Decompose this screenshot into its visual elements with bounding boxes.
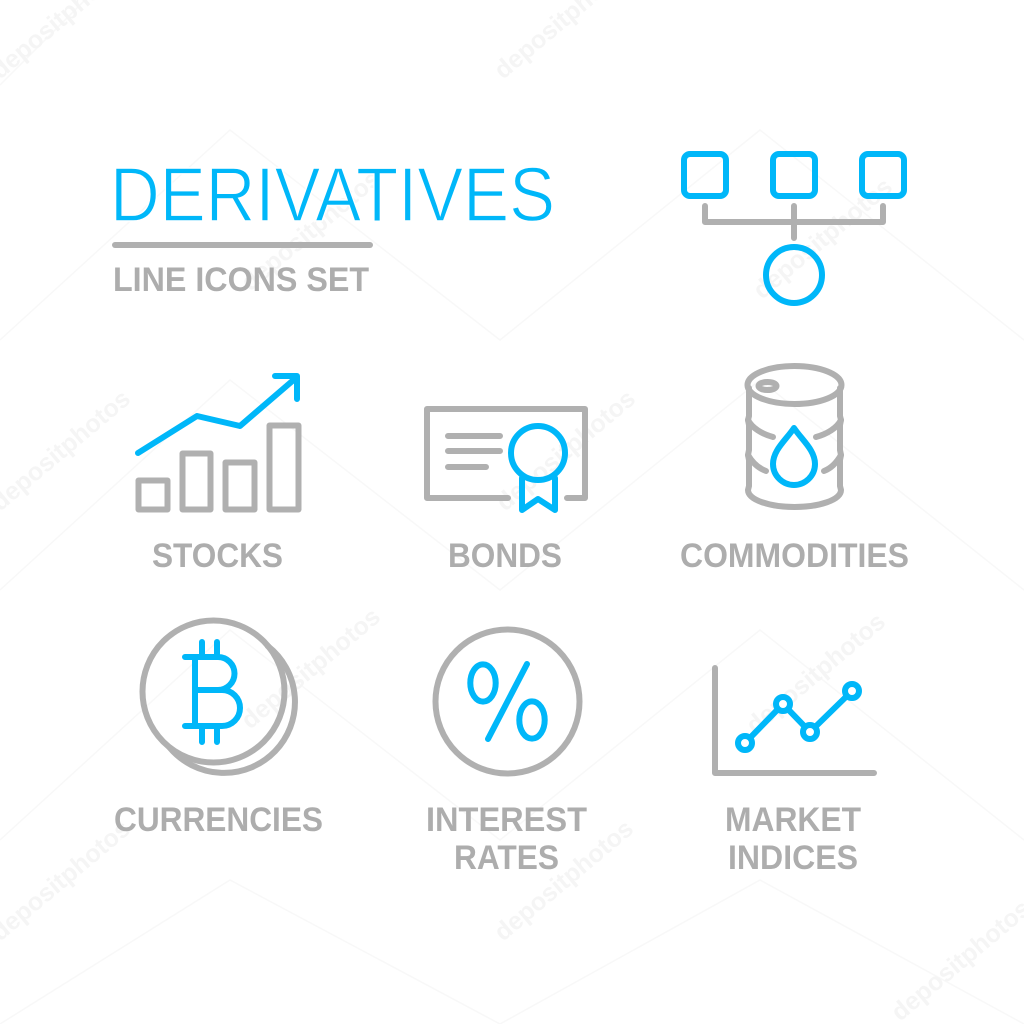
icon: bitcoin coins <box>142 620 295 773</box>
title: DERIVATIVES <box>110 152 555 238</box>
icon: oil barrel <box>748 366 842 507</box>
title underline <box>115 242 370 248</box>
label: bonds: BONDS <box>448 537 562 575</box>
label: market indices <box>725 801 861 877</box>
subtitle: LINE ICONS SET <box>113 261 369 299</box>
watermark text: depositphotos <box>748 172 898 305</box>
icon: bond certificate <box>427 409 585 510</box>
label: stocks: STOCKS <box>152 537 283 575</box>
label: commodities: COMMODITIES <box>680 537 909 575</box>
icon: percent <box>436 630 580 774</box>
icon: hierarchy <box>684 154 904 303</box>
icon: market index chart <box>715 668 874 773</box>
watermark text: depositphotos <box>491 384 641 517</box>
label: interest rates: INTEREST <box>426 801 587 839</box>
label: market indices: MARKET <box>725 801 861 839</box>
icon: stocks chart <box>138 376 298 510</box>
label: interest rates <box>426 801 587 877</box>
watermark text: depositphotos <box>489 814 639 947</box>
label: currencies: CURRENCIES <box>114 801 323 839</box>
watermark text: depositphotos <box>741 607 891 740</box>
watermark text: depositphotos <box>236 602 386 735</box>
label: market indices: INDICES <box>728 839 858 877</box>
watermark text: depositphotos <box>236 164 386 297</box>
label: interest rates: RATES <box>454 839 559 877</box>
